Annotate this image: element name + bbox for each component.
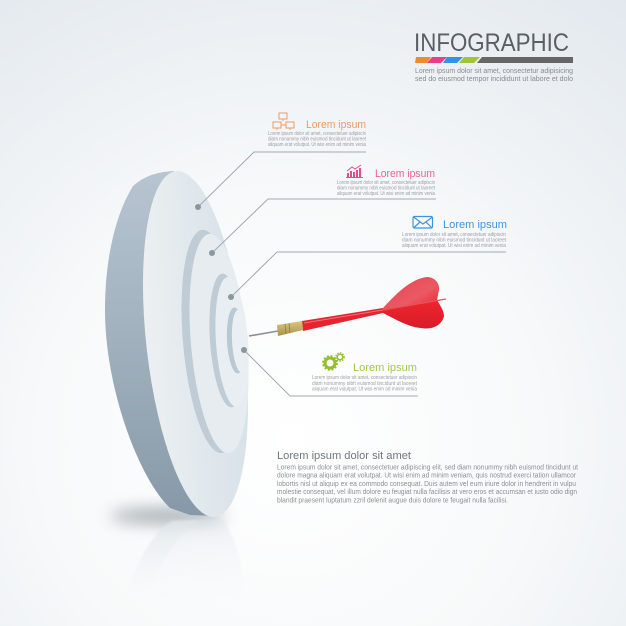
text bbox=[402, 232, 507, 249]
colour bar bbox=[415, 57, 573, 63]
body paragraph bbox=[277, 462, 579, 504]
target board bbox=[105, 166, 264, 522]
callout: orange bbox=[268, 113, 367, 148]
text bbox=[268, 131, 367, 148]
icon: envelope bbox=[413, 216, 432, 228]
body paragraph: blandit praesent luptatum zzril delenit augue duis dolore te feugait nulla facilisi. bbox=[277, 496, 508, 504]
subtitle: Lorem ipsum dolor sit amet, consectetur adipisicing bbox=[415, 66, 573, 75]
ring 2 bbox=[173, 227, 256, 456]
board side bbox=[105, 171, 215, 516]
subtitle: sed do eiusmod tempor incididunt ut labore et dolo bbox=[415, 74, 573, 83]
heading: Lorem ipsum bbox=[306, 119, 366, 131]
floor shadow bbox=[110, 508, 226, 524]
title block bbox=[414, 29, 573, 83]
callout: pink bbox=[337, 165, 436, 197]
dart bbox=[249, 277, 446, 336]
body paragraph: molestie consequat, vel illum dolore eu feugiat nulla facilisis at vero eros et accumsan et iusto odio dign bbox=[277, 487, 577, 496]
body text block bbox=[277, 450, 579, 504]
leader line 3 bbox=[228, 252, 506, 300]
brass grip bbox=[277, 321, 303, 336]
text: Lorem ipsum dolor sit amet, consectetuer adipiscin bbox=[312, 375, 417, 381]
heading: Lorem ipsum bbox=[353, 362, 417, 374]
text bbox=[312, 375, 418, 392]
subtitle bbox=[415, 66, 573, 83]
text: aliquam erat volutpat. Ut wisi enim ad minim venia bbox=[312, 386, 417, 392]
ring 4 bbox=[225, 307, 250, 374]
needle bbox=[249, 331, 278, 336]
flight bottom bbox=[383, 300, 444, 328]
text: aliquam erat volutpat. Ut wisi enim ad minim venia bbox=[402, 243, 506, 249]
text: diam nonummy nibh euismod tincidunt ut laoreet bbox=[312, 381, 418, 387]
stem bbox=[383, 299, 446, 310]
text bbox=[337, 180, 436, 197]
heading: Lorem ipsum bbox=[375, 168, 435, 180]
text: aliquam erat volutpat. Ut wisi enim ad minim venia bbox=[337, 191, 435, 197]
flight top bbox=[383, 277, 439, 310]
title: INFOGRAPHIC bbox=[414, 29, 569, 57]
heading: Lorem ipsum bbox=[443, 219, 507, 231]
text: Lorem ipsum dolor sit amet, consectetuer adipiscin bbox=[268, 131, 366, 137]
text: diam nonummy nibh euismod tincidunt ut laoreet bbox=[402, 238, 507, 244]
board face bbox=[127, 166, 264, 522]
leader line 2 bbox=[209, 199, 436, 256]
body paragraph: dolore magna aliquam erat volutpat. Ut wisi enim ad minim veniam, quis nostrud exerci tation ullamcor bbox=[277, 471, 576, 480]
text: diam nonummy nibh euismod tincidunt ut laoreet bbox=[337, 186, 436, 192]
leader line 4 bbox=[241, 347, 418, 396]
icon: gears bbox=[323, 353, 344, 370]
board reflection bbox=[125, 519, 244, 605]
callout: green bbox=[312, 353, 418, 392]
body heading: Lorem ipsum dolor sit amet bbox=[277, 450, 411, 462]
body paragraph: Lorem ipsum dolor sit amet, consectetuer adipiscing elit, sed diam nonummy nibh euismod tincidunt ut bbox=[277, 462, 579, 472]
icon: network bbox=[273, 113, 294, 130]
callout: blue bbox=[402, 216, 507, 249]
text: diam nonummy nibh euismod tincidunt ut laoreet bbox=[268, 136, 367, 142]
shaft bbox=[302, 308, 383, 331]
text: Lorem ipsum dolor sit amet, consectetuer adipiscin bbox=[337, 180, 435, 186]
text: Lorem ipsum dolor sit amet, consectetuer adipiscin bbox=[402, 232, 506, 238]
body paragraph: lobortis nisl ut aliquip ex ea commodo consequat. Duis autem vel eum iriure dolor in hendrerit in vulpu bbox=[277, 479, 576, 488]
leader line 1 bbox=[195, 152, 366, 210]
text: aliquam erat volutpat. Ut wisi enim ad minim venia bbox=[268, 142, 366, 148]
icon: chart bbox=[346, 165, 363, 178]
ring 3 bbox=[205, 272, 252, 409]
